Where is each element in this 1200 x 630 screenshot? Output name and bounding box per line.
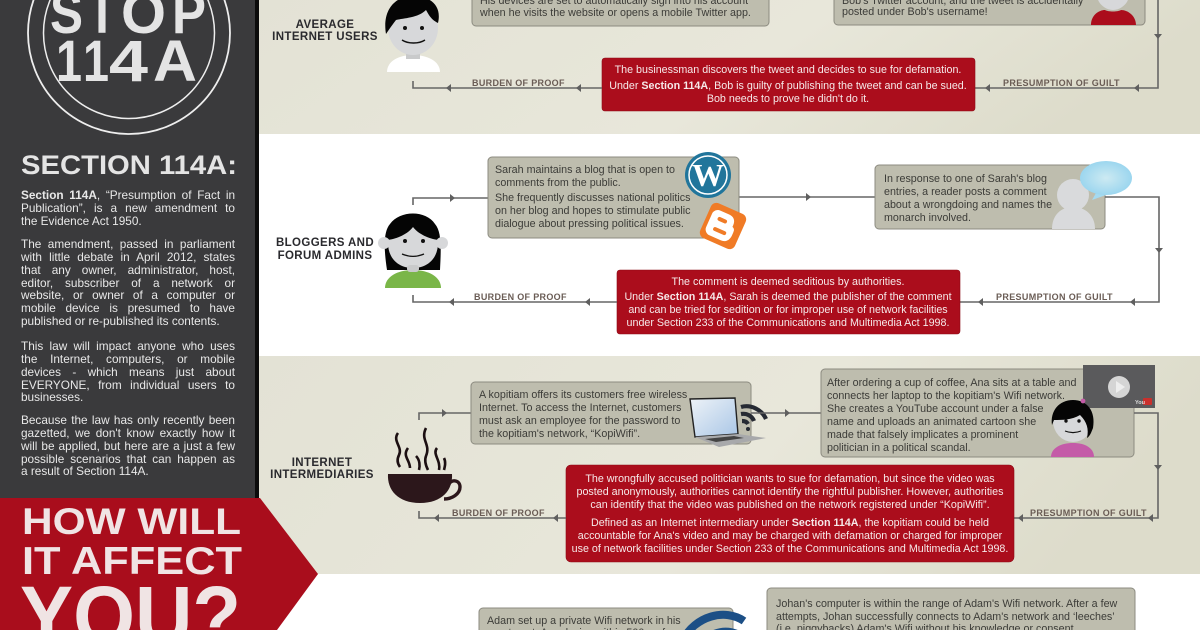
sidebar background (0, 0, 255, 498)
paragraph: possible scenarios: will be applied, but here are a just a few (21, 439, 235, 453)
scenario 3: internet intermediaries (270, 365, 1162, 562)
paragraph: who is impacted: EVERYONE, from individual users to (21, 378, 235, 392)
label: burden of proof: BURDEN OF PROOF (452, 508, 545, 518)
paragraph: the amendment: published or re-published its contents. (21, 314, 220, 328)
icon: boy avatar (385, 0, 440, 72)
panel: internet intermediaries background (259, 356, 1200, 574)
text box: accidental tweet (834, 0, 1145, 25)
paragraph: who is impacted: businesses. (21, 390, 83, 404)
text box: Adam's private Wifi: Adam set up a private Wifi network in his (487, 615, 681, 627)
label: bloggers and forum admins: BLOGGERS AND (276, 237, 374, 249)
callout: sedition outcome: under Section 233 of the Communications and Multimedia Act 1998. (627, 317, 949, 329)
callout: defamation outcome: Bob needs to prove he didn't do it. (707, 93, 869, 105)
text box: reader comment (875, 165, 1105, 229)
label: bloggers and forum admins: FORUM ADMINS (278, 250, 372, 262)
text box: Sarah's blog: dialogue about pressing political issues. (495, 218, 684, 230)
callout: kopitiam held accountable: The wrongfully accused politician wants to sue for defamation, but since the video was (585, 473, 995, 485)
callout arrow: how will it affect you: IT AFFECT (22, 540, 242, 583)
paragraph: the amendment: mobile device is presumed to have (21, 301, 235, 315)
arrow: burden of proof path (419, 511, 566, 522)
text box: Sarah's blog (488, 157, 739, 238)
text box: Sarah's blog: comments from the public. (495, 177, 621, 189)
icon: WordPress logo: W (692, 157, 724, 193)
text box: kopitiam wifi: A kopitiam offers its customers free wireless (479, 389, 687, 401)
text box: Johan leeches Wifi: attempts, Johan successfully connects to Adam's network and ‘leeches’ (776, 611, 1115, 623)
text box: Sarah's blog: She frequently discusses national politics (495, 192, 690, 204)
arrow: blog box to reader box (739, 193, 875, 201)
icon: laptop with wifi (690, 398, 766, 447)
paragraph: who is impacted (21, 339, 235, 404)
callout: sedition outcome: Under Section 114A, Sarah is deemed the publisher of the comment (624, 291, 952, 303)
paragraph: the amendment: that any owner, administrator, host, (21, 263, 235, 277)
text box: kopitiam wifi: the kopitiam's network, “KopiWifi”. (479, 428, 640, 440)
label: burden of proof: BURDEN OF PROOF (472, 78, 565, 88)
icon: speech bubble (1080, 161, 1132, 200)
text box: Sarah's blog: Sarah maintains a blog that is open to (495, 164, 675, 176)
callout: kopitiam held accountable: accountable for Ana's video and may be charged with defamation or charged for improper (578, 530, 1003, 542)
label: presumption of guilt: PRESUMPTION OF GUILT (996, 292, 1113, 302)
paragraph: the amendment: website, or owner of a computer or (21, 288, 235, 302)
paragraph: definition: Section 114A, “Presumption of Fact in (21, 188, 235, 202)
arrow: presumption of guilt path (1014, 413, 1162, 522)
icon: video player: You (1135, 400, 1145, 406)
text box: kopitiam wifi: must ask an employee for the password to (479, 415, 680, 427)
paragraph: definition (21, 188, 235, 228)
arrow: burden of proof path (413, 295, 617, 306)
paragraph: possible scenarios (21, 413, 235, 478)
paragraph: possible scenarios: Because the law has only recently been (21, 413, 235, 427)
icon: Ana avatar (1051, 399, 1094, 457)
icon: WordPress logo (685, 152, 731, 198)
icon: video player (1083, 365, 1155, 408)
icon: coffee cup (388, 428, 460, 503)
text box: Adam's private Wifi (479, 608, 733, 630)
logo: Stop 114A stamp (28, 0, 230, 134)
text box: Ana uploads video (821, 369, 1134, 457)
paragraph: possible scenarios: possible scenarios that can happen as (21, 452, 235, 466)
sidebar text block (21, 188, 235, 478)
label: internet intermediaries: INTERMEDIARIES (270, 469, 374, 481)
callout: defamation outcome (602, 58, 975, 111)
text box: reader comment: about a wrongdoing and names the (884, 199, 1052, 211)
label: average internet users: AVERAGE (296, 19, 354, 31)
paragraph: who is impacted: devices - which means just about (21, 365, 235, 379)
label: internet intermediaries: INTERNET (292, 457, 352, 469)
scenario 4: Wifi leeching (479, 588, 1135, 630)
icon: Blogger logo (698, 201, 748, 251)
arrow: to kopitiam box (419, 409, 471, 420)
paragraph: the amendment (21, 237, 235, 328)
callout: kopitiam held accountable: posted anonymously, authorities cannot identify the rightful publisher. However, authorities (576, 486, 1004, 498)
text box: Ana uploads video: politician in a political scandal. (827, 442, 971, 454)
sidebar divider (255, 0, 259, 498)
paragraph: the amendment: with little debate in April 2012, states (21, 250, 235, 264)
scenario 1: average internet users (272, 0, 1162, 111)
arrow: presumption of guilt path (975, 0, 1162, 92)
callout: kopitiam held accountable: can identify that the video was published on the network registered under “KopiWifi”. (590, 499, 990, 511)
text box: reader comment: entries, a reader posts a comment (884, 186, 1047, 198)
callout: sedition outcome: The comment is deemed seditious by authorities. (672, 276, 904, 288)
text box: accidental tweet: posted under Bob's username! (842, 6, 988, 18)
text box: Bob's devices (472, 0, 769, 26)
icon: blue Wifi signal (683, 615, 744, 630)
arrow: to blog box (413, 194, 488, 205)
label: burden of proof: BURDEN OF PROOF (474, 292, 567, 302)
text box: Johan leeches Wifi (767, 588, 1135, 630)
callout: sedition outcome: and can be tried for sedition or for improper use of network facilities (628, 304, 948, 316)
callout: defamation outcome: Under Section 114A, Bob is guilty of publishing the tweet and can be sued. (609, 80, 967, 92)
paragraph: definition: Publication”, is a new amendment to (21, 201, 235, 215)
text box: Ana uploads video: made that falsely implicates a prominent (827, 429, 1018, 441)
icon: girl avatar (378, 214, 448, 288)
text box: Bob's devices: when he visits the website or opens a mobile Twitter app. (479, 7, 751, 19)
text box: reader comment: In response to one of Sarah's blog (884, 173, 1047, 185)
text box: Ana uploads video: name and uploads an animated cartoon she (827, 416, 1036, 428)
callout: defamation outcome: The businessman discovers the tweet and decides to sue for defamation. (615, 64, 961, 76)
text box: Ana uploads video: After ordering a cup of coffee, Ana sits at a table and (827, 377, 1077, 389)
callout: kopitiam held accountable: use of network facilities under Section 233 of the Communications and Multimedia Act 1998. (572, 543, 1008, 555)
paragraph: definition: the Evidence Act 1950. (21, 214, 142, 228)
arrow: burden of proof path (413, 81, 602, 92)
paragraph: who is impacted: the Internet, computers, or mobile (21, 352, 235, 366)
text box: Sarah's blog: on her blog and hopes to stimulate public (495, 205, 691, 217)
scenario 2: bloggers and forum admins (276, 152, 1163, 334)
callout: sedition outcome (617, 270, 960, 334)
arrow: presumption of guilt path (960, 197, 1163, 306)
text box: kopitiam wifi: Internet. To access the Internet, customers (479, 402, 681, 414)
label: average internet users: INTERNET USERS (272, 31, 378, 43)
paragraph: the amendment: The amendment, passed in parliament (21, 237, 235, 251)
label: presumption of guilt: PRESUMPTION OF GUILT (1030, 508, 1147, 518)
text box: Johan leeches Wifi: Johan's computer is within the range of Adam's Wifi network. After a few (776, 598, 1118, 610)
label: presumption of guilt: PRESUMPTION OF GUILT (1003, 78, 1120, 88)
paragraph: who is impacted: This law will impact anyone who uses (21, 339, 235, 353)
paragraph: the amendment: editor, subscriber of a network or (21, 276, 235, 290)
paragraph: possible scenarios: a result of Section 114A. (21, 464, 149, 478)
callout: kopitiam held accountable (566, 465, 1014, 562)
arrow: kopitiam box to Ana box (751, 409, 821, 417)
text box: Ana uploads video: connects her laptop to the kopitiam's Wifi network. (827, 390, 1065, 402)
logo: Stop 114A stamp: A (153, 29, 197, 94)
text box: reader comment: monarch involved. (884, 212, 971, 224)
text box: Ana uploads video: She creates a YouTube account under a false (827, 403, 1044, 415)
callout arrow: how will it affect you: HOW WILL (22, 501, 241, 542)
callout arrow: how will it affect you (0, 498, 318, 630)
logo: Stop 114A stamp: 1 (56, 29, 82, 94)
text box: kopitiam wifi (471, 382, 751, 444)
heading: Section 114A: SECTION 114A: (21, 150, 237, 180)
logo: Stop 114A stamp: 1 (83, 29, 109, 94)
paragraph: possible scenarios: gazetted, we don't know exactly how it (21, 426, 235, 440)
logo: Stop 114A stamp: 4 (109, 29, 148, 94)
callout: kopitiam held accountable: Defined as an Internet intermediary under Section 114A, the kopitiam could be held (591, 517, 989, 529)
panel: average internet users background (259, 0, 1200, 134)
